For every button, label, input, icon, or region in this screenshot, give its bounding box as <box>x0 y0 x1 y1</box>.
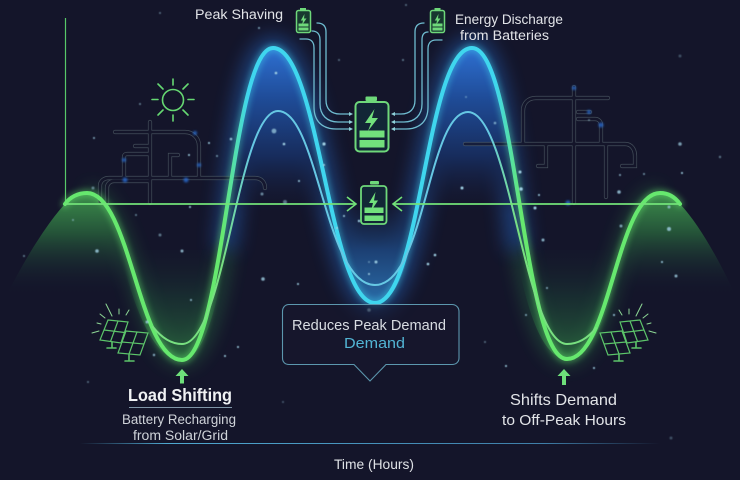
text: battery recharging from solar/grid <box>122 412 236 443</box>
icon: sun <box>152 79 194 121</box>
text: battery recharging from solar/grid: from Solar/Grid <box>133 428 228 443</box>
horizontal baseline with right arrow <box>393 197 680 211</box>
text: battery recharging from solar/grid: Battery Recharging <box>122 412 236 427</box>
callout: reduces peak demand: Reduces Peak Demand <box>292 318 446 334</box>
pipes: left schematic <box>100 122 265 203</box>
demand curve: outer load curve <box>65 48 680 360</box>
arrow: up to left trough <box>176 369 188 384</box>
heading: energy discharge from batteries: Energy Discharge <box>455 12 563 27</box>
icon: small battery top left <box>296 8 310 32</box>
connector arrowheads <box>349 112 395 131</box>
pipes: right schematic <box>465 87 635 203</box>
wide glow behind green troughs <box>87 193 660 360</box>
arrow: up to right trough <box>558 369 570 385</box>
text: shifts demand to off-peak hours <box>502 392 626 429</box>
horizontal baseline with left arrow <box>65 197 356 211</box>
callout: reduces peak demand: Demand <box>344 336 405 352</box>
icon: solar panels left <box>92 304 148 361</box>
connector lines: right batteries to central battery <box>393 23 442 129</box>
heading: peak shaving: Peak Shaving <box>195 7 283 22</box>
heading: load shifting: Load Shifting <box>128 385 232 405</box>
icon: solar panels right <box>600 304 656 361</box>
axis label: time: Time (Hours) <box>334 457 414 472</box>
text: shifts demand to off-peak hours: Shifts Demand <box>510 392 617 409</box>
wide glow behind blue peaks <box>225 48 518 303</box>
vertical axis <box>64 18 66 204</box>
text: shifts demand to off-peak hours: to Off-Peak Hours <box>502 412 626 429</box>
heading: energy discharge from batteries <box>455 12 563 43</box>
connector lines: left batteries to central battery <box>300 23 350 129</box>
icon: lower battery <box>361 181 386 224</box>
glow spots on pipes <box>122 86 604 206</box>
callout: reduces peak demand <box>282 304 459 381</box>
fills under and around the demand curve <box>0 48 740 360</box>
time axis <box>80 442 660 444</box>
icon: central battery <box>356 96 388 152</box>
icon: small battery top right <box>430 8 444 32</box>
heading: energy discharge from batteries: from Batteries <box>460 28 549 43</box>
demand curve: inner shaved curve <box>153 111 596 344</box>
